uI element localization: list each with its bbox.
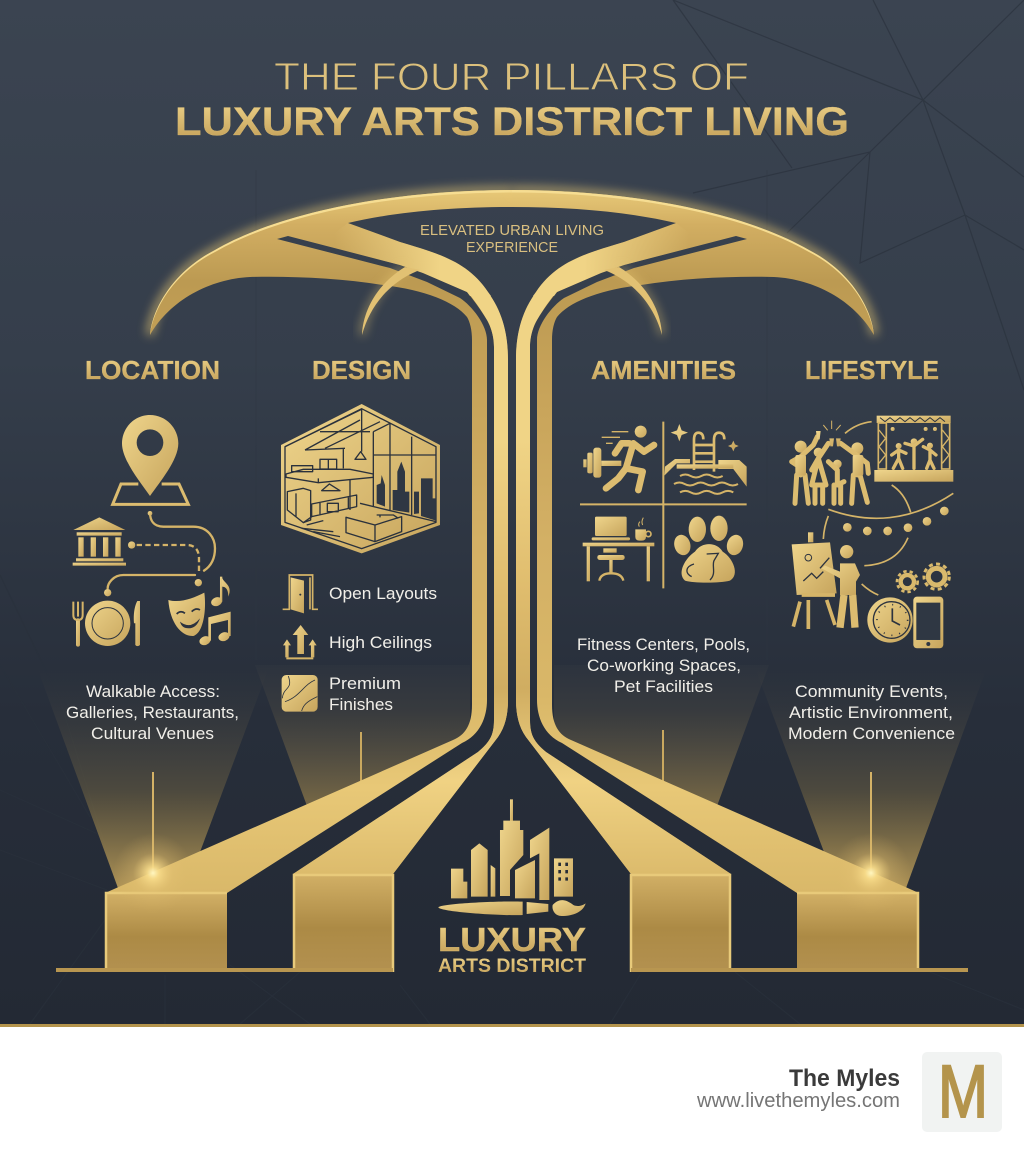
description: Fitness Centers, Pools,	[577, 635, 750, 654]
light beam	[255, 665, 470, 806]
heading: LIFESTYLE	[805, 355, 939, 385]
icon: clock	[867, 597, 913, 643]
icon: phone	[913, 597, 943, 648]
beam centre line	[152, 772, 154, 874]
description: Walkable Access:	[86, 682, 220, 701]
brand badge: M	[938, 1050, 988, 1133]
icon: map pin	[122, 415, 178, 496]
icon: skyline and paintbrush	[438, 799, 586, 916]
feature: premium finishes: Finishes	[329, 695, 393, 714]
feature: high ceilings: High Ceilings	[329, 633, 432, 652]
icon group: community and art	[792, 416, 953, 648]
panel: amenities	[554, 355, 769, 806]
description	[66, 682, 239, 743]
icon group: map pin and venues	[73, 415, 231, 647]
footer gold rule	[0, 1024, 1024, 1027]
icon: pool	[664, 424, 747, 494]
wing and bands	[105, 190, 512, 893]
icon: string lights	[828, 493, 953, 535]
title	[175, 56, 849, 144]
inner claw	[362, 267, 420, 335]
pillar box outer	[105, 893, 227, 972]
base line segment	[56, 968, 393, 972]
light beam	[38, 670, 268, 888]
heading: AMENITIES	[591, 355, 736, 385]
feature: open layouts	[283, 575, 437, 613]
spark left	[113, 833, 193, 913]
logo sub wordmark: ARTS DISTRICT	[438, 956, 586, 977]
description	[577, 635, 750, 696]
icon: runner and dumbbell	[583, 426, 654, 490]
panel: location	[38, 355, 268, 888]
panel: design	[255, 355, 470, 806]
feature: premium finishes: Premium	[329, 674, 401, 693]
icon: gears	[897, 564, 949, 592]
icon: desk	[583, 517, 654, 581]
inner band stem highlight	[293, 295, 508, 874]
pillar box inner	[293, 874, 393, 972]
beam centre line	[870, 772, 872, 874]
icon: people toasting	[792, 421, 872, 503]
inner claw glow	[362, 267, 405, 335]
arch caption: ELEVATED URBAN LIVING	[420, 222, 604, 239]
logo wordmark: LUXURY	[438, 921, 586, 958]
icon: door	[283, 575, 318, 613]
title line 1: THE FOUR PILLARS OF	[274, 56, 749, 99]
description: Co-working Spaces,	[587, 656, 741, 675]
spark right	[831, 833, 911, 913]
arch and pillars: left half	[56, 190, 512, 972]
panel: lifestyle	[756, 355, 986, 888]
icon: plate and cutlery	[73, 601, 140, 647]
icon: theatre mask and notes	[168, 577, 231, 647]
icon: paw with dog	[672, 516, 745, 583]
feature: premium finishes	[282, 674, 401, 714]
beam centre line	[360, 732, 362, 782]
arch caption	[420, 222, 604, 256]
icon: interior cutaway hexagon	[281, 404, 440, 553]
heading: DESIGN	[312, 355, 411, 385]
footer background	[0, 1027, 1024, 1154]
description: Modern Convenience	[788, 724, 955, 743]
arch and pillars: right half	[512, 190, 968, 972]
beam centre line	[662, 730, 664, 782]
description	[788, 682, 955, 743]
light beam	[756, 670, 986, 888]
title line 2: LUXURY ARTS DISTRICT LIVING	[175, 100, 849, 144]
feature: open layouts: Open Layouts	[329, 584, 437, 603]
route lines	[108, 513, 215, 588]
arch bright edge	[150, 190, 512, 335]
arch caption: EXPERIENCE	[466, 239, 558, 256]
icon group: four amenities grid	[580, 422, 747, 588]
description: Pet Facilities	[614, 677, 713, 696]
heading: LOCATION	[85, 355, 220, 385]
icon: concert stage	[874, 416, 953, 482]
description: Artistic Environment,	[789, 703, 953, 722]
description: Community Events,	[795, 682, 948, 701]
icon: painter at easel	[792, 532, 860, 629]
description: Galleries, Restaurants,	[66, 703, 239, 722]
footer	[0, 1024, 1024, 1154]
logo: luxury arts district	[438, 799, 586, 977]
icon: museum	[73, 517, 126, 566]
brand name: The Myles	[789, 1065, 900, 1092]
inner band upper highlight	[320, 223, 491, 296]
arch glow	[150, 190, 512, 335]
icon: up arrows	[283, 625, 317, 658]
website: www.livethemyles.com	[696, 1090, 900, 1112]
light beam	[554, 665, 769, 806]
feature: high ceilings	[283, 625, 432, 658]
icon: marble swatch	[282, 675, 318, 712]
description: Cultural Venues	[91, 724, 214, 743]
